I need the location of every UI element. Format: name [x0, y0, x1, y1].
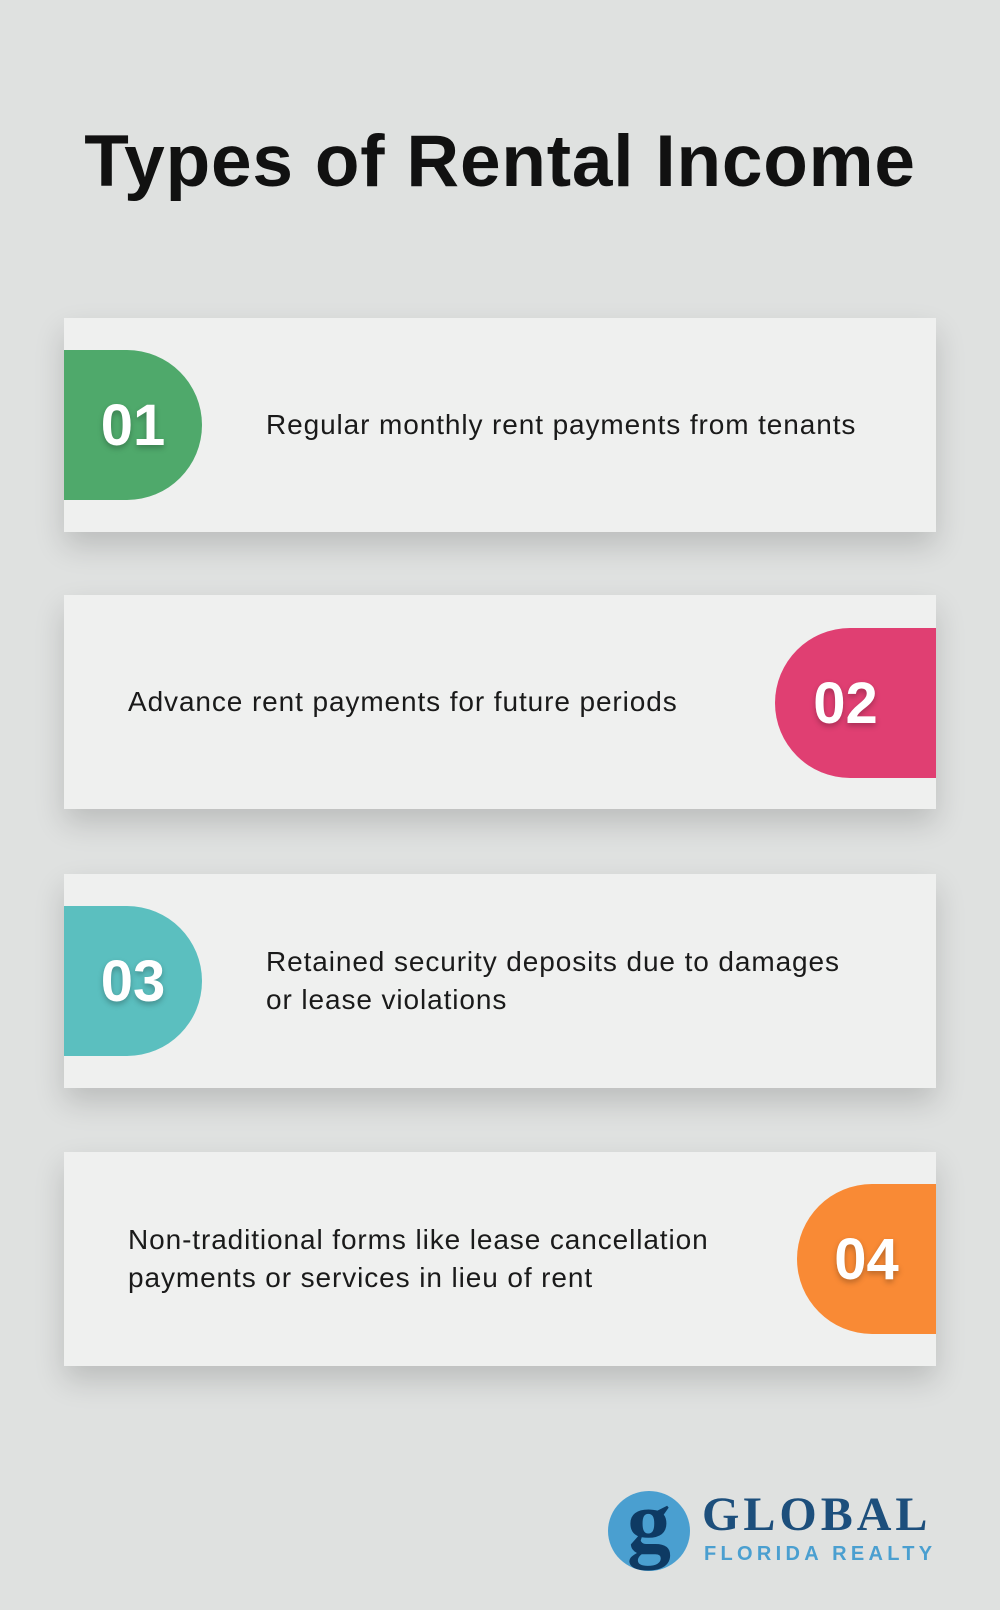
badge 02	[775, 628, 936, 778]
card 03	[64, 874, 936, 1088]
badge 04: 04	[834, 1226, 899, 1292]
text 04: payments or services in lieu of rent	[128, 1262, 593, 1293]
title: Types of Rental Income	[84, 121, 916, 202]
text 04: Non-traditional forms like lease cancellation	[128, 1224, 709, 1255]
badge 03: 03	[101, 948, 165, 1014]
text 03: Retained security deposits due to damages	[266, 946, 840, 977]
text 01: Regular monthly rent payments from tenants	[266, 409, 856, 440]
logo icon	[608, 1491, 690, 1571]
text 03	[266, 946, 840, 1015]
badge 03	[64, 906, 202, 1056]
logo text: GLOBAL	[702, 1488, 931, 1541]
card 02	[64, 595, 936, 809]
text 03: or lease violations	[266, 984, 507, 1015]
card 01	[64, 318, 936, 532]
badge 02: 02	[813, 670, 878, 736]
badge 01: 01	[101, 392, 165, 458]
logo	[608, 1474, 936, 1571]
card 04	[64, 1152, 936, 1366]
text 02: Advance rent payments for future periods	[128, 686, 678, 717]
badge 04	[797, 1184, 936, 1334]
text 04	[128, 1224, 709, 1293]
logo: FLORIDA REALTY	[704, 1543, 936, 1565]
logo icon: g	[627, 1474, 671, 1571]
badge 01	[64, 350, 202, 500]
